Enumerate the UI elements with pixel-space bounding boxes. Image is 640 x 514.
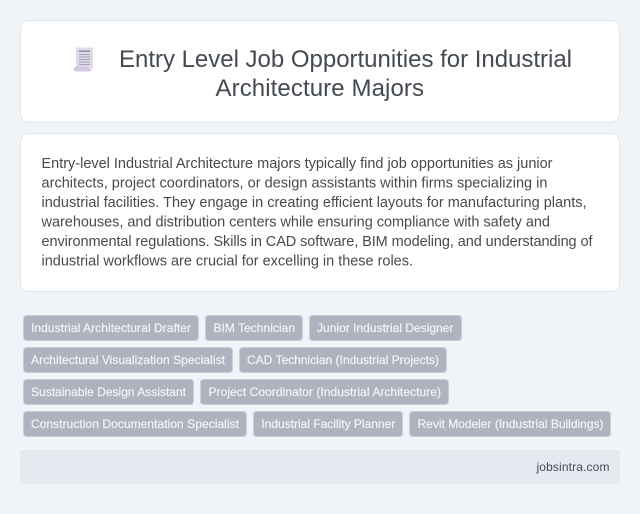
tag <box>240 348 446 372</box>
text block: description: industrial facilities. They engage in creating efficient layouts for manufacturing plants, <box>42 195 586 211</box>
title: Architecture Majors <box>216 75 424 102</box>
tag: Revit Modeler (Industrial Buildings) <box>418 417 604 431</box>
panel: description <box>20 134 620 292</box>
title: Entry Level Job Opportunities for Industrial <box>119 46 572 73</box>
text block: description: warehouses, and distribution centers while ensuring compliance with safety and <box>40 214 550 230</box>
footer <box>20 450 620 484</box>
tag <box>200 380 448 404</box>
tag <box>410 412 610 436</box>
tag: Project Coordinator (Industrial Architecture) <box>208 385 441 399</box>
tag: Industrial Architectural Drafter <box>31 321 191 335</box>
text block: description <box>40 156 593 270</box>
tag <box>254 412 402 436</box>
tag: BIM Technician <box>214 321 295 335</box>
tag <box>24 316 198 340</box>
tag: Construction Documentation Specialist <box>31 417 240 431</box>
text block: description: industrial workflows are crucial for excelling in these roles. <box>42 254 413 270</box>
tag: Architectural Visualization Specialist <box>31 353 226 367</box>
text block: description: architects, project coordinators, or design assistants within firms specializing in <box>42 176 548 192</box>
tag <box>24 412 246 436</box>
tag <box>24 348 232 372</box>
tag <box>206 316 302 340</box>
tag: Sustainable Design Assistant <box>31 385 187 399</box>
tag: Junior Industrial Designer <box>317 321 454 335</box>
icon: document scroll <box>74 48 93 72</box>
text block: description: Entry-level Industrial Architecture majors typically find job opportunities as junior <box>42 156 553 172</box>
tag: CAD Technician (Industrial Projects) <box>247 353 439 367</box>
text block: description: environmental regulations. Skills in CAD software, BIM modeling, and understanding of <box>42 234 593 250</box>
tags: job titles <box>24 316 610 436</box>
tag <box>24 380 194 404</box>
title <box>119 46 572 102</box>
tag <box>310 316 462 340</box>
footer source text: jobsintra.com <box>536 460 610 474</box>
panel: header <box>20 20 620 122</box>
tag: Industrial Facility Planner <box>261 417 395 431</box>
